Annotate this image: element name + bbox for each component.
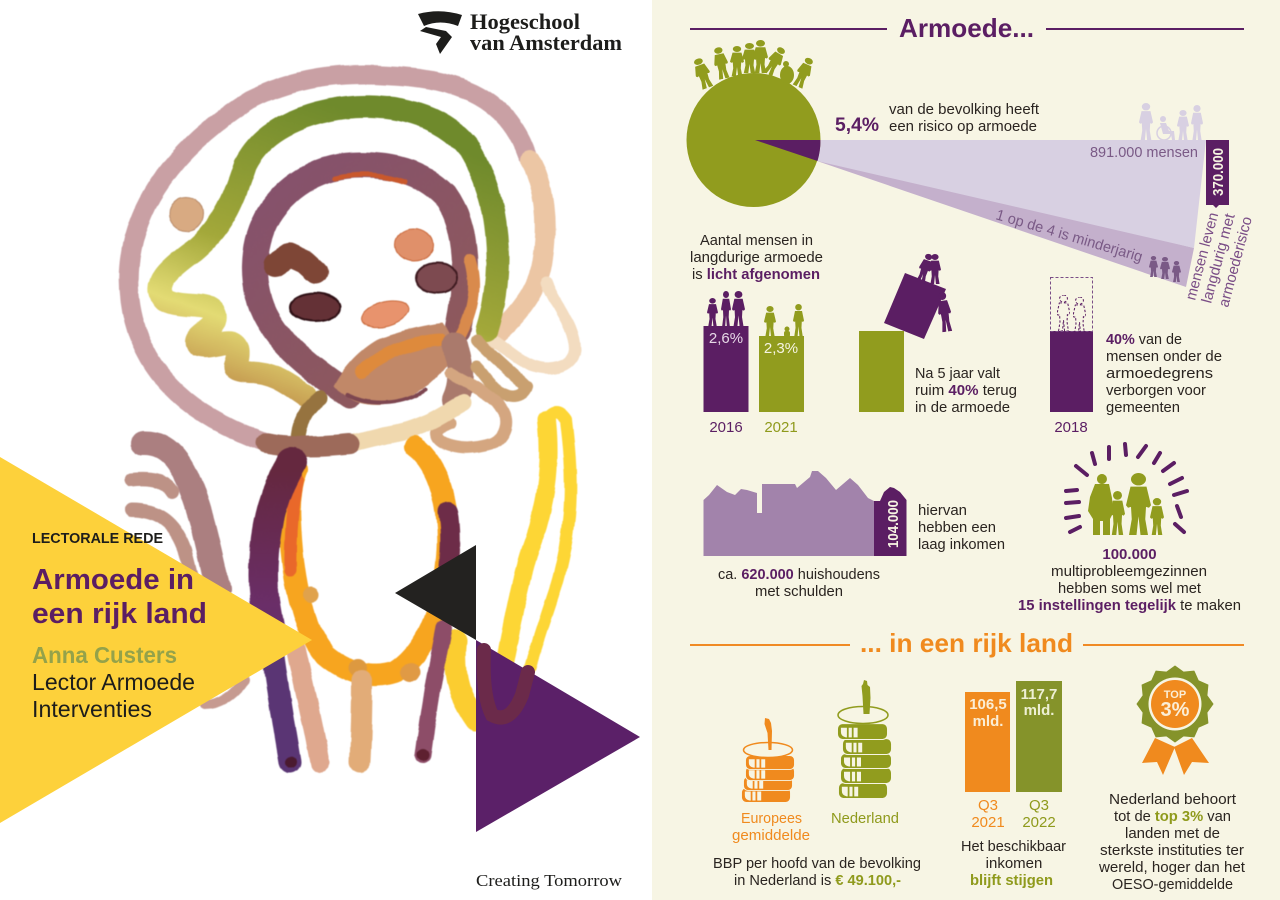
stat: coins GDP: [713, 680, 921, 889]
stat: long-term poverty bars: 2,6%: [709, 330, 743, 347]
cover text: LECTORALE REDE: [32, 531, 163, 547]
long-term poverty label: mensen leven: [1182, 211, 1222, 302]
stat: top 3% badge: Nederland behoort: [1109, 791, 1237, 808]
ribbons: [1142, 738, 1209, 775]
stat: multi-problem families: 100.000: [1102, 546, 1157, 563]
left arm: [143, 443, 218, 590]
neck and right hand lobes: [298, 398, 320, 442]
stat: top 3% badge: 3%: [1161, 699, 1190, 721]
stat: disposable income bars: [961, 681, 1066, 889]
yellow stripe: [530, 412, 571, 668]
people on tilted block: [915, 252, 954, 333]
bar 2021: [759, 336, 804, 412]
pale people on fan: [1139, 103, 1203, 140]
long-term poverty label: armoederisico: [1215, 215, 1256, 309]
stat: disposable income bars: 117,7: [1021, 686, 1057, 703]
heading: Armoede: Armoede...: [899, 13, 1034, 43]
stat: households with debts: 104.000: [885, 500, 902, 548]
collar: [266, 443, 350, 446]
cover text: Armoede in: [32, 564, 194, 596]
stat: disposable income bars: Q3: [978, 797, 998, 814]
panel: right statistics: [652, 0, 1280, 900]
370.000 tag: 370.000: [1210, 148, 1227, 196]
logo: Hogeschool van Amsterdam: van Amsterdam: [470, 30, 622, 55]
green ring and wavy tail: [160, 106, 497, 395]
stat: top 3% badge: sterkste instituties ter: [1100, 842, 1244, 859]
5,4% label: 5,4%: [835, 115, 879, 136]
pie: [686, 73, 820, 207]
stat: long-term poverty bars: is licht afgenomen: [692, 266, 820, 283]
black triangle: [395, 545, 476, 640]
stat: coins GDP: BBP per hoofd van de bevolking: [713, 855, 921, 872]
people on globe: [690, 40, 816, 90]
logo: Hogeschool van Amsterdam: [418, 9, 622, 55]
stat: disposable income bars: 2021: [971, 814, 1005, 831]
face marks: [395, 229, 433, 261]
stat: hidden poverty 2018: mensen onder de: [1106, 348, 1222, 365]
stat: falling back into poverty: ruim 40% terug: [915, 382, 1017, 399]
family: [1088, 473, 1164, 535]
panel: left cover: [0, 0, 652, 900]
pie chart with fan: [686, 40, 1256, 309]
hands ring: [1066, 444, 1187, 532]
stat: coins GDP: in Nederland is € 49.100,-: [734, 872, 901, 889]
bar 2016: [704, 326, 748, 412]
stat: long-term poverty bars: 2021: [764, 419, 798, 436]
stat: multi-problem families: multiprobleemgezinnen: [1051, 563, 1207, 580]
stat: disposable income bars: Het beschikbaar: [961, 838, 1066, 855]
stat: hidden poverty 2018: 2018: [1054, 419, 1088, 436]
stat: falling back into poverty: in de armoede: [915, 399, 1010, 416]
stat: hidden poverty 2018: armoedegrens: [1106, 365, 1213, 382]
stat: households with debts: laag inkomen: [918, 536, 1005, 553]
5,4% label: [835, 101, 1040, 136]
stat: households with debts: hebben een: [918, 519, 996, 536]
feet: [285, 756, 297, 768]
orange coins: [741, 718, 795, 802]
5,4% label: van de bevolking heeft: [889, 101, 1040, 118]
stat: households with debts: met schulden: [755, 583, 843, 600]
cover text: [32, 531, 207, 722]
small people in strip: [1149, 256, 1181, 282]
purple triangle: [476, 640, 640, 832]
cover text: Interventies: [32, 696, 152, 722]
rosette: [1137, 666, 1213, 742]
stat: falling back into poverty: [859, 252, 1017, 416]
stat: disposable income bars: inkomen: [986, 855, 1042, 872]
tagline: Creating Tomorrow: [476, 871, 623, 890]
stat: multi-problem families: 15 instellingen tegelijk te maken: [1018, 597, 1241, 614]
stat: hidden poverty 2018: [1050, 278, 1222, 436]
stat: hidden poverty 2018: verborgen voor: [1106, 382, 1206, 399]
fan text: 891.000 mensen: [1090, 144, 1198, 161]
stat: top 3% badge: [1098, 666, 1246, 893]
heading: in een rijk land: ... in een rijk land: [860, 628, 1073, 658]
stat: households with debts: [704, 471, 1005, 600]
yellow triangle: [0, 457, 312, 823]
dark stripe of the body: [263, 462, 292, 630]
stat: disposable income bars: mld.: [1024, 702, 1054, 719]
stat: top 3% badge: landen met de: [1125, 825, 1220, 842]
cover text: Anna Custers: [32, 642, 177, 668]
right beige loop: [490, 160, 545, 340]
curve seen through the purple triangle: [484, 650, 528, 718]
cover text: Lector Armoede: [32, 669, 195, 695]
stat: top 3% badge: TOP: [1164, 689, 1186, 701]
cover text: een rijk land: [32, 598, 207, 630]
stat: long-term poverty bars: langdurige armoede: [690, 249, 823, 266]
stat: multi-problem families: [1018, 444, 1241, 614]
stat: top 3% badge: wereld, hoger dan het: [1098, 859, 1246, 876]
stat: long-term poverty bars: [690, 232, 823, 436]
stat: coins GDP: Europees: [741, 810, 802, 827]
stat: long-term poverty bars: Aantal mensen in: [700, 232, 813, 249]
370.000 tag: [1206, 140, 1229, 208]
stat: hidden poverty 2018: 40% van de: [1106, 331, 1182, 348]
stat: hidden poverty 2018: gemeenten: [1106, 399, 1180, 416]
outer ring: [129, 74, 527, 443]
pie slice: [755, 140, 820, 161]
fan: minors strip: [817, 155, 1194, 287]
stat: disposable income bars: mld.: [973, 713, 1003, 730]
green coins: [837, 680, 892, 798]
stat: disposable income bars: 106,5: [969, 696, 1007, 713]
5,4% label: een risico op armoede: [889, 118, 1037, 135]
stat: falling back into poverty: Na 5 jaar valt: [915, 365, 1001, 382]
orange oval torso: [290, 447, 448, 675]
watercolour drawing of a figure: [129, 74, 575, 768]
fan: at-risk wedge: [817, 140, 1206, 248]
long-term poverty label: [1182, 211, 1256, 309]
inner purple ring: [255, 165, 465, 395]
stat: households with debts: ca. 620.000 huishoudens: [718, 566, 880, 583]
stat: coins GDP: Nederland: [831, 810, 899, 827]
stat: disposable income bars: 2022: [1022, 814, 1056, 831]
people on bars: [707, 291, 745, 326]
logo: Hogeschool van Amsterdam: Hogeschool: [470, 9, 580, 34]
stat: long-term poverty bars: 2016: [709, 419, 743, 436]
long-term poverty label: langdurig met: [1198, 211, 1239, 305]
pie chart with fan: 1 op de 4 is minderjarig: [994, 207, 1144, 266]
stat: disposable income bars: blijft stijgen: [970, 872, 1053, 889]
stat: coins GDP: gemiddelde: [732, 827, 810, 844]
stat: disposable income bars: Q3: [1029, 797, 1049, 814]
stat: top 3% badge: OESO-gemiddelde: [1112, 876, 1233, 893]
stat: top 3% badge: tot de top 3% van: [1114, 808, 1231, 825]
stat: multi-problem families: hebben soms wel met: [1058, 580, 1202, 597]
chin patch: [333, 323, 454, 405]
stat: long-term poverty bars: 2,3%: [764, 340, 798, 357]
stat: households with debts: hiervan: [918, 502, 967, 519]
